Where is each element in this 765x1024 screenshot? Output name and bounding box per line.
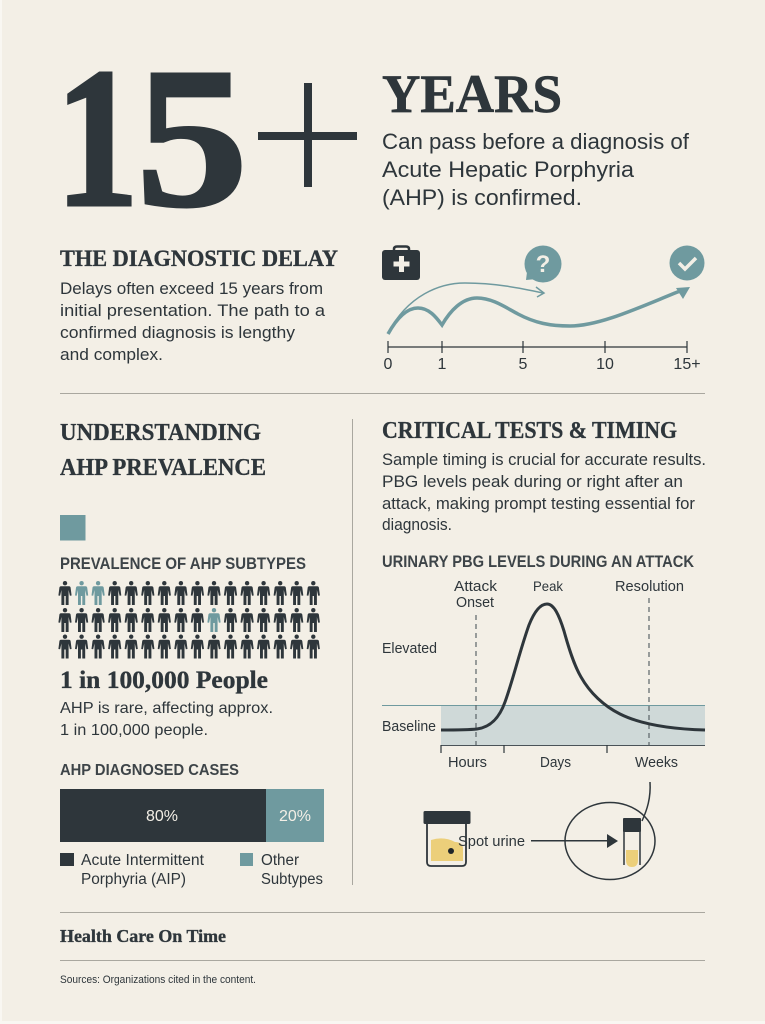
line chart: urinary PBG levels: Resolution xyxy=(615,579,684,595)
heading: critical tests and timing: CRITICAL TESTS & TIMING xyxy=(382,418,677,444)
stacked bar chart: diagnosed cases: 20% xyxy=(279,808,311,825)
line chart: urinary PBG levels xyxy=(382,578,705,771)
heading: urinary PBG levels: URINARY PBG LEVELS DURING AN ATTACK xyxy=(382,553,694,571)
stacked bar chart: diagnosed cases xyxy=(60,789,324,842)
heading: years: YEARS xyxy=(382,64,562,124)
text block: sample timing: PBG levels peak during or right after an xyxy=(382,473,683,491)
headline statistic: 15+: 5 xyxy=(136,28,248,249)
icon: medical bag xyxy=(382,246,420,280)
headline statistic: 15+ xyxy=(55,28,357,249)
heading: understanding AHP prevalence: UNDERSTANDING xyxy=(60,420,261,446)
text block: headline description: Can pass before a diagnosis of xyxy=(382,129,690,154)
arrow: to test tube xyxy=(531,834,618,848)
footer: brand name: Health Care On Time xyxy=(60,926,226,946)
legend: bar chart subtypes: Other xyxy=(261,852,299,869)
text block: prevalence description xyxy=(60,700,273,739)
axis labels: 1 xyxy=(438,356,447,373)
line chart: urinary PBG levels: Weeks xyxy=(635,755,678,771)
text block: diagnostic delay description xyxy=(60,279,326,364)
heading: prevalence of AHP subtypes: PREVALENCE OF AHP SUBTYPES xyxy=(60,554,306,573)
legend swatch: teal square xyxy=(60,515,86,540)
footer: sources: Sources: Organizations cited in the content. xyxy=(60,974,256,986)
pictogram: people xyxy=(58,581,320,658)
axis labels: 0 xyxy=(384,356,393,373)
thick arrow: actual path xyxy=(388,287,690,334)
icon: question bubble: ? xyxy=(536,251,550,278)
headline statistic: 15+: 1 xyxy=(55,28,139,249)
text block: diagnostic delay description: Delays often exceed 15 years from xyxy=(60,279,323,298)
text block: prevalence description: 1 in 100,000 people. xyxy=(60,722,208,739)
line chart: urinary PBG levels: Baseline xyxy=(382,719,436,735)
thin arrow: expected path xyxy=(388,283,544,333)
legend: bar chart subtypes: Subtypes xyxy=(261,871,323,888)
text block: diagnostic delay description: confirmed diagnosis is lengthy xyxy=(60,323,296,342)
text block: sample timing xyxy=(382,451,706,534)
text block: headline description: Acute Hepatic Porphyria xyxy=(382,157,635,182)
line chart: urinary PBG levels: Days xyxy=(540,755,571,771)
text block: headline description xyxy=(382,129,690,210)
axis: years xyxy=(388,341,687,353)
text block: prevalence description: AHP is rare, affecting approx. xyxy=(60,700,273,717)
legend: bar chart subtypes: Acute Intermittent xyxy=(81,852,205,869)
icon: urine sample cup xyxy=(424,811,470,866)
axis labels: 10 xyxy=(596,356,614,373)
line chart: urinary PBG levels: Attack xyxy=(454,579,498,595)
icon: check mark circle xyxy=(670,246,704,280)
text block: diagnostic delay description: and complex. xyxy=(60,345,163,364)
text block: headline description: (AHP) is confirmed. xyxy=(382,185,582,210)
line chart: urinary PBG levels: Elevated xyxy=(382,641,437,657)
axis labels: 5 xyxy=(519,356,528,373)
text block: sample timing: Sample timing is crucial for accurate results. xyxy=(382,451,706,469)
icon: magnified test tube xyxy=(565,782,655,880)
line chart: urinary PBG levels: Hours xyxy=(448,755,487,771)
label: spot urine: Spot urine xyxy=(458,833,525,850)
axis labels: 15+ xyxy=(673,356,701,373)
heading: AHP diagnosed cases: AHP DIAGNOSED CASES xyxy=(60,762,239,779)
text block: sample timing: attack, making prompt testing essential for xyxy=(382,495,696,513)
line chart: urinary PBG levels: Onset xyxy=(456,595,494,611)
text block: diagnostic delay description: initial presentation. The path to a xyxy=(60,301,326,320)
line chart: urinary PBG levels: Peak xyxy=(533,578,564,594)
text block: sample timing: diagnosis. xyxy=(382,516,452,534)
axis labels xyxy=(384,356,701,373)
stacked bar chart: diagnosed cases: 80% xyxy=(146,808,178,825)
icon: question bubble xyxy=(524,246,562,282)
chart: diagnostic timeline xyxy=(382,246,704,373)
heading: the diagnostic delay: THE DIAGNOSTIC DELAY xyxy=(60,246,338,271)
legend: bar chart subtypes: Porphyria (AIP) xyxy=(81,871,186,888)
heading: understanding AHP prevalence xyxy=(60,420,266,481)
statistic: 1 in 100,000 people: 1 in 100,000 People xyxy=(60,667,268,694)
heading: understanding AHP prevalence: AHP PREVALENCE xyxy=(60,455,266,481)
legend: bar chart subtypes xyxy=(60,852,323,888)
